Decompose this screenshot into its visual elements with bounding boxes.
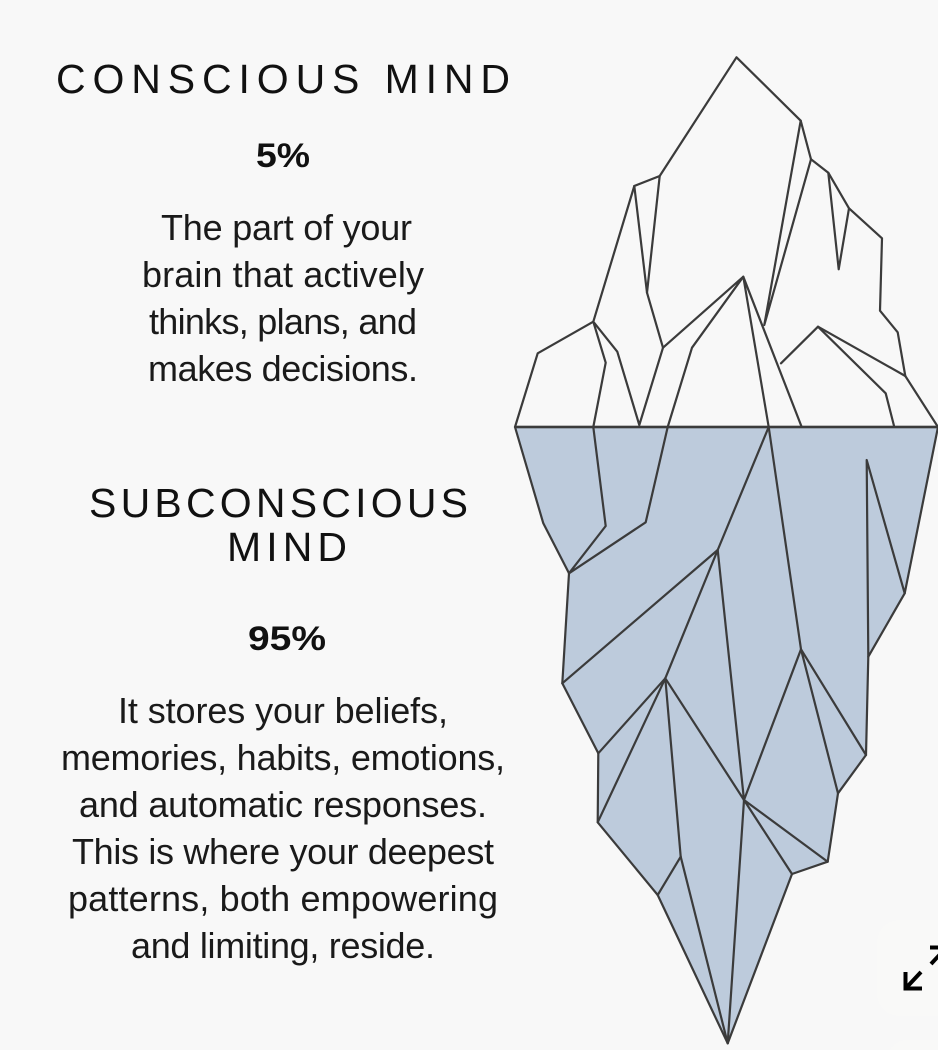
iceberg illustration (515, 57, 938, 1043)
text block: subconscious description: memories, habits, emotions, (61, 737, 505, 778)
text block: conscious description: thinks, plans, and (149, 301, 417, 342)
text block: conscious description (142, 207, 424, 389)
text block: conscious description: makes decisions. (148, 348, 418, 389)
heading: conscious mind: CONSCIOUS MIND (56, 56, 510, 102)
text block: subconscious description (61, 690, 505, 966)
percentage: 95%: 95% (248, 620, 326, 658)
panel: conscious mind text (56, 56, 510, 389)
iceberg: above water (515, 57, 938, 427)
cropped footer panel (887, 1040, 938, 1050)
expand button (877, 920, 938, 1016)
waterline (515, 426, 938, 428)
heading: subconscious mind: MIND (227, 524, 347, 570)
text block: subconscious description: and limiting, reside. (131, 925, 435, 966)
heading: subconscious mind: SUBCONSCIOUS (89, 480, 468, 526)
text block: subconscious description: patterns, both empowering (68, 878, 498, 919)
text block: subconscious description: and automatic responses. (79, 784, 487, 825)
percentage: 5%: 5% (256, 137, 310, 175)
panel: subconscious mind text (61, 480, 505, 966)
icon: expand arrows (906, 948, 938, 988)
text block: conscious description: The part of your (161, 207, 412, 248)
text block: subconscious description: This is where your deepest (72, 831, 494, 872)
heading: subconscious mind (89, 480, 468, 570)
text block: subconscious description: It stores your beliefs, (118, 690, 448, 731)
iceberg: below water (515, 427, 938, 1043)
text block: conscious description: brain that actively (142, 254, 424, 295)
